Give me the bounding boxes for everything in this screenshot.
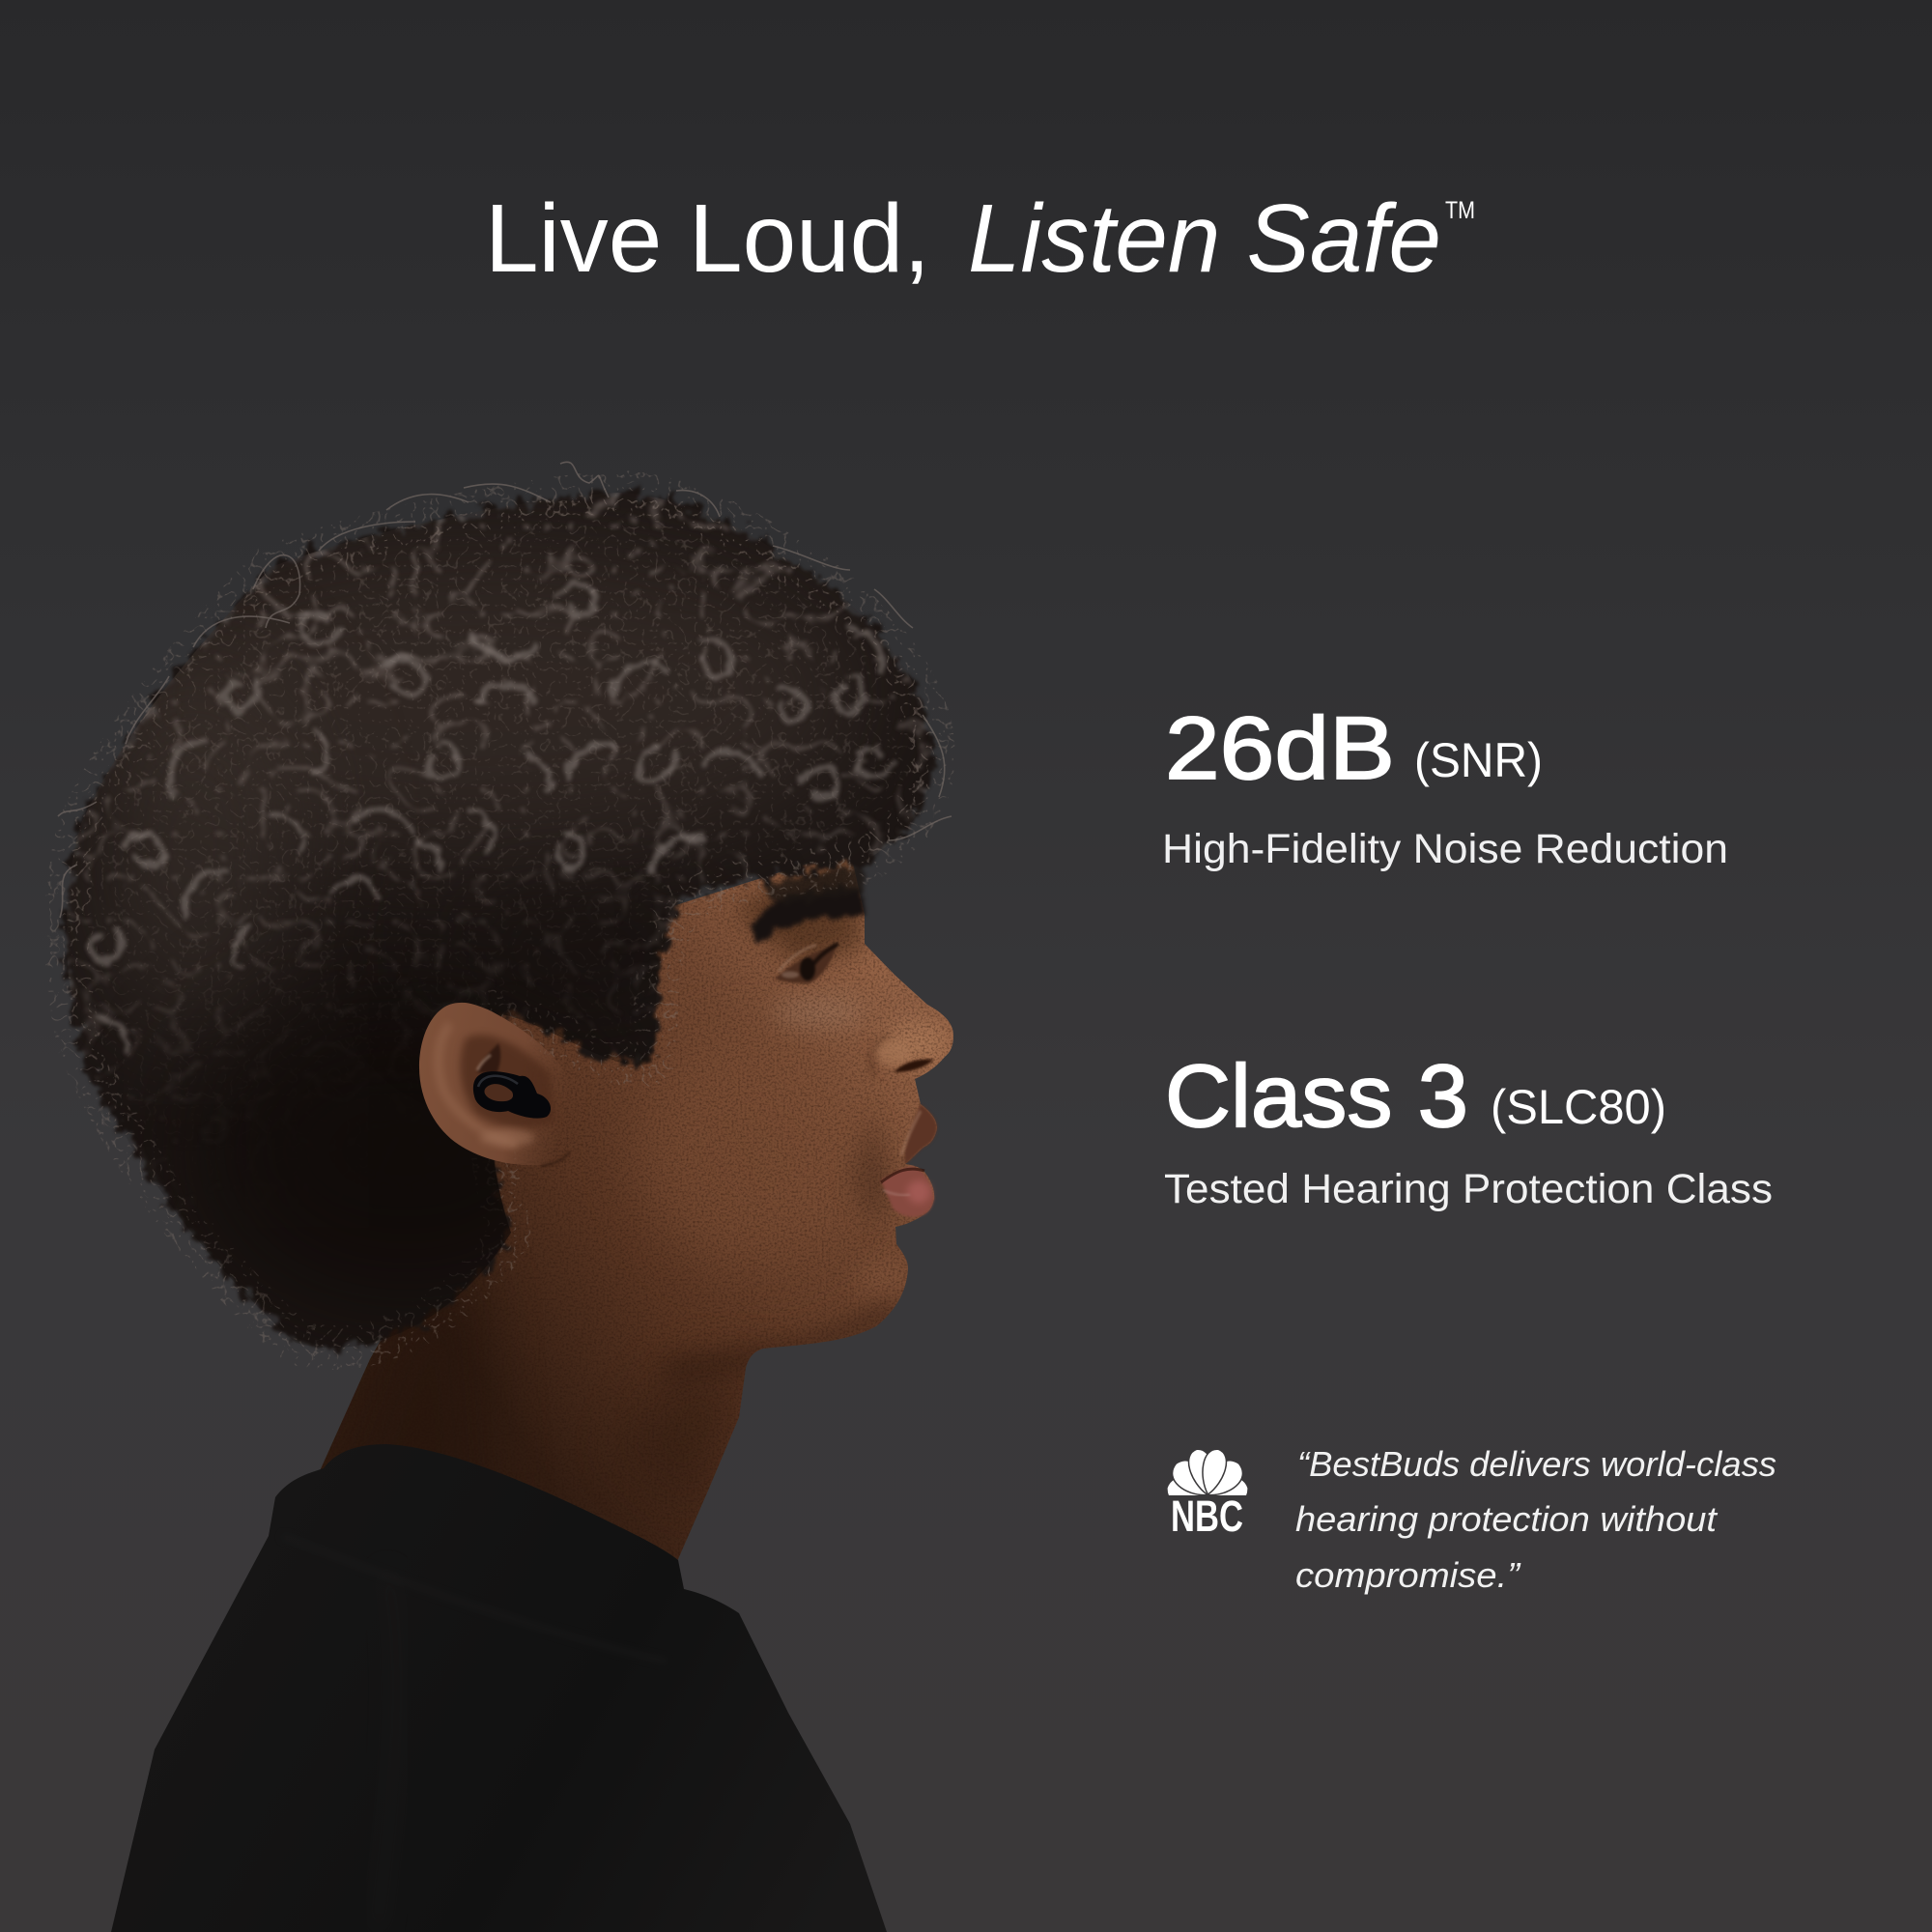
hair lighting and texture [67, 493, 933, 1348]
icon: NBC peacock logo [1167, 1450, 1248, 1532]
quote text: compromise.” [1295, 1555, 1521, 1595]
frizz halo [67, 493, 933, 1348]
title: Listen Safe [968, 185, 1441, 293]
icon: NBC peacock logo: NBC [1171, 1492, 1243, 1541]
eye [775, 944, 838, 983]
portrait: man in profile wearing earplug [58, 462, 953, 1932]
nose wing and nostril [871, 1036, 934, 1077]
quote text: “BestBuds delivers world-class [1297, 1444, 1776, 1484]
stat value: Class 3 [1165, 1047, 1468, 1146]
title: TM [1445, 197, 1475, 224]
stat: 26dB SNR [1162, 699, 1728, 872]
quote text [1295, 1444, 1776, 1595]
face and neck [290, 850, 953, 1575]
stat unit: (SLC80) [1491, 1080, 1666, 1134]
hair mass [67, 493, 933, 1348]
stat: Class 3 SLC80 [1164, 1047, 1773, 1212]
lips [881, 1104, 937, 1217]
curl highlights [87, 580, 896, 1058]
stat description: High-Fidelity Noise Reduction [1162, 826, 1728, 872]
press quote [1164, 1444, 1776, 1595]
stat unit: (SNR) [1414, 733, 1543, 787]
title: Live Loud, [485, 185, 930, 293]
eyebrow [752, 865, 865, 942]
quote text: hearing protection without [1295, 1499, 1719, 1539]
stat value: 26dB [1165, 699, 1395, 798]
stat description: Tested Hearing Protection Class [1164, 1166, 1773, 1212]
flyaway strands [58, 462, 952, 918]
hair [58, 462, 952, 1348]
ear [419, 1003, 572, 1166]
title [485, 185, 1475, 293]
black t-shirt [111, 1444, 887, 1932]
earplug [473, 1071, 551, 1119]
